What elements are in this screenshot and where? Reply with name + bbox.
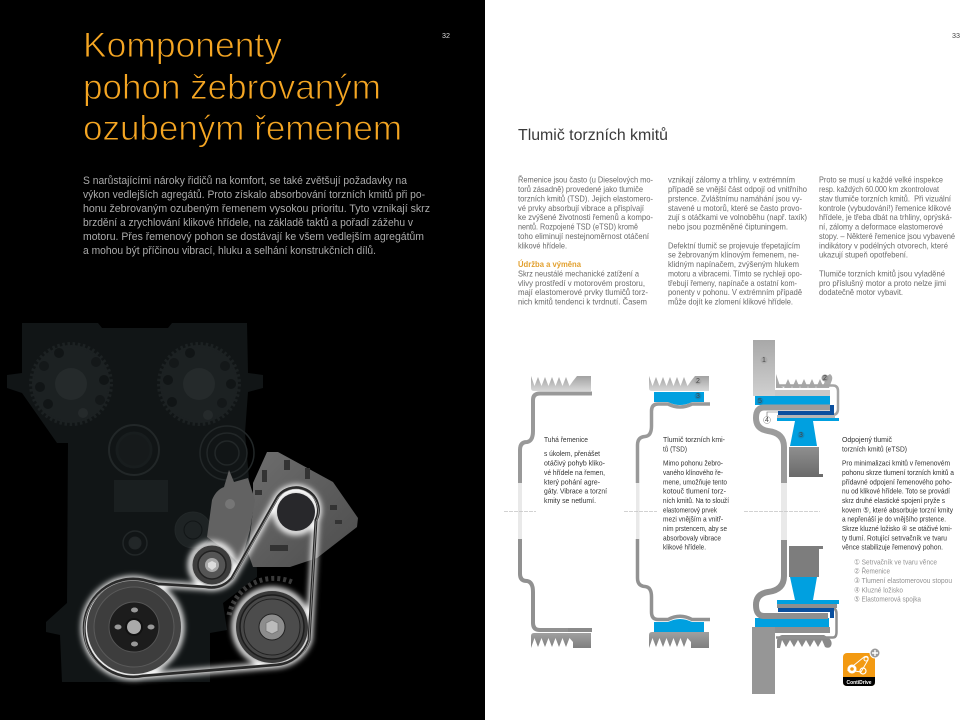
elastomeric coupling top [777,418,839,446]
flywheel bottom [752,627,775,694]
text column 1: nentů. Rozpojené TSD (eTSD) kromě [518,222,638,232]
diagram text: eTSD: skrz druhé elastické spojení pryže s [842,496,945,505]
text column 2 [668,175,807,306]
legend list: ② Řemenice [854,567,890,576]
text column 3 [819,175,955,297]
text column 1: torů zásadně) provedené jako tlumiče [518,184,643,194]
diagram text: eTSD [842,435,955,552]
callout 2 [822,374,828,382]
pulley wall bottom [756,540,828,616]
diagram text: rigid pulley: s úkolem, přenášet [544,449,600,458]
text column 2: vznikají zálomy a trhliny, v extrémním [668,175,795,185]
legend list: ① Setrvačník ve tvaru věnce [854,557,937,566]
diagram text: TSD: ních kmitů. Na to slouží [663,496,730,505]
title: pohon žebrovaným [83,68,381,107]
text column 2: klidným napínačem, zvýšeným hlukem [668,259,799,269]
inertia ring bottom [789,546,823,577]
hub fade [636,483,640,539]
hub fade [518,483,522,539]
engine illustration [7,323,358,682]
elastomer band bottom [755,618,829,627]
tensioner body [207,470,255,565]
text column 3: ní, zálomy a deformace elastomerové [819,222,943,232]
text column 2: třebují řemeny, napínače a ostatní kom- [668,278,797,288]
intro text block [83,175,430,257]
outer pulley ring bottom [776,608,836,638]
pulley wall [520,394,592,483]
slide bearing top [778,405,834,415]
diagram text: TSD: ním prstencem, aby se [663,524,727,533]
text column 1: torzních kmitů (TSD). Jejich elastomero- [518,193,653,203]
diagram text: rigid pulley: gáty. Vibrace a torzní [544,487,608,496]
diagram text: rigid pulley: otáčivý pohyb kliko- [544,459,606,468]
slide bearing bottom [778,608,834,618]
diagram: eTSD [744,340,839,694]
title [83,26,402,148]
belt section top [649,376,709,391]
text column 3: Proto se musí u každé velké inspekce [819,175,943,185]
icon: ContiDrive badge [843,648,880,686]
text column 1: ke zvýšené životnosti řemenů a kompo- [518,212,653,222]
inner band bottom [777,604,837,608]
pulley wall top [756,408,830,483]
diagram: TSD [624,376,710,648]
diagram text: rigid pulley [544,435,608,505]
text column 3: Tlumiče torzních kmitů jsou vyladěné [819,268,945,278]
belt section top [531,376,591,391]
center line [624,510,657,512]
alternator [248,452,358,567]
camshaft gear left [32,345,110,423]
intro text block: honu žebrovaným ozubeným řemenem vysokou prioritu. Tyto vznikají skrz [83,203,430,215]
text column 2: případě se vnější část odpojí od vnitřního [668,184,807,194]
text column 1: mají elastomerové prvky tlumičů torz- [518,287,648,297]
hub fade [781,483,787,540]
panel: black left page [0,0,485,720]
callout 2: 2 [696,378,700,385]
legend list [854,557,952,604]
text column 1: nich kmitů tendenci k tvrdnutí. Časem [518,296,647,306]
diagram text: rigid pulley: který pohání agre- [544,477,600,486]
diagram text: TSD: Mimo pohonu žebro- [663,459,723,468]
text column 1: Skrz neustálé mechanické zatížení a [518,268,639,278]
callout 4: 4 [765,417,769,424]
lower right pulley [236,591,308,663]
belt highlight [84,489,318,678]
intro text block: motoru. Přes řemenový pohon se dostávají ke všem vedlejším agregátům [83,231,424,243]
pulley wall [638,404,710,483]
text column 2: Defektní tlumič se projevuje třepetajícím [668,240,800,250]
callout 1 [760,356,768,364]
center line [744,510,820,512]
belt section top [776,374,832,388]
flywheel top [753,340,775,396]
text column 1: toho eliminují nestejnoměrnost otáčení [518,231,650,241]
outer pulley ring top [776,386,838,415]
page number 32: 32 [442,31,450,40]
diagram text: rigid pulley: kmity se netlumí. [544,496,596,505]
ghost bracket [114,480,168,512]
callout 3: 3 [696,393,700,400]
intro text block: brzdění a zrychlování klikové hřídele, na základě taktů a pořadí zážehu v [83,217,413,229]
diagram text: TSD [663,435,730,552]
subheading: Údržba a výměna: Údržba a výměna [518,258,581,269]
elastomer band top [755,396,830,405]
diagram text: TSD: vaného klínového ře- [663,468,723,477]
callout 2: 2 [823,375,827,382]
diagram text: eTSD: a nepřenáší je do vnějšího prstence. [842,515,946,524]
legend list: ④ Kluzné ložisko [854,585,903,594]
callout 2 [694,378,702,385]
diagram text: eTSD: Pro minimalizaci kmitů v řemenovém [842,459,950,468]
diagram text: TSD: klikové hřídele. [663,543,706,552]
text column 1: vlivy prostředí v motorovém prostoru, [518,278,645,288]
callout 3: 3 [799,432,803,439]
text column 3: indikátory v podélných otvorech, které [819,240,948,250]
heading: Tlumič torzních kmitů: Tlumič torzních kmitů [518,127,668,144]
callout 5 [756,398,764,405]
belt glow [84,488,318,677]
text column 2: ponenty v pohonu. V extrémním případě [668,287,802,297]
text column 3: pro příslušný motor a proto nelze jimi [819,278,946,288]
diagram text: TSD: kotouč tlumení torz- [663,487,727,496]
callout 3 [694,392,702,400]
callout 3 [798,432,804,439]
diagram text: eTSD: Odpojený tlumič [842,435,892,444]
diagram text: rigid pulley: Tuhá řemenice [544,435,588,444]
crankshaft pulley [87,580,181,674]
elastomeric coupling bottom [777,577,839,604]
diagram text: TSD: absorbovaly vibrace [663,533,721,542]
elastomer bottom [654,619,704,632]
text column 2: motoru a vibracemi. Tímto se rychleji opo- [668,268,802,278]
diagram text: eTSD: ty tlumí. Rotující setrvačník ve tvaru [842,533,947,542]
inertia ring top [789,447,823,477]
inner band top [777,415,835,418]
text column 3: dodatečně motor vybavit. [819,287,903,297]
belt section bottom [531,633,591,648]
diagram text: TSD: elastomerový prvek [663,505,717,514]
diagram text: TSD: Tlumič torzních kmi- [663,435,725,444]
belt section bottom [649,632,709,648]
center line [504,510,536,512]
belt section bottom [777,635,832,648]
text column 1: Řemenice jsou často (u Dieselových mo- [518,175,653,185]
text column 2: může dojít ke zlomení klikové hřídele. [668,296,793,306]
text column 1: vé prvky absorbují vibrace a přispívají [518,203,645,213]
text column 2: zují s otáčkami ve volnoběhu (např. taxík) [668,212,807,222]
intro text block: a mohou být příčinou vibrací, hluku a selhání konstrukčních dílů. [83,245,376,257]
belt [84,488,318,677]
icon: ContiDrive badge: ContiDrive [846,680,872,686]
idler pulleys (ghosted) [109,425,254,555]
text column 2: nebo jsou pozměněné čiptuningem. [668,222,788,232]
bearing leader [767,412,778,417]
callout 4 [764,416,770,424]
diagram text: rigid pulley: vé hřídele na řemen, [544,468,605,477]
alternator pulley [277,493,315,531]
text column 2: stavené u motorů, které se často provo- [668,203,802,213]
callout 5: 5 [758,398,762,405]
legend list: ⑤ Elastomerová spojka [854,595,922,604]
diagram text: TSD: mene, umožňuje tento [663,477,727,486]
intro text block: výkon vedlejších agregátů. Proto získalo absorbování torzních kmitů při po- [83,189,425,201]
text column 1: klikové hřídele. [518,240,567,250]
text column 3: resp. každých 60.000 km zkontrolovat [819,184,940,194]
text column 3: ukazují stupeň opotřebení. [819,250,908,260]
intro text block: S narůstajícími nároky řidičů na komfort, se také zvětšují požadavky na [83,175,408,187]
text column 2: se žebrovaným klínovým řemenem, ne- [668,250,799,260]
diagram: rigid pulley [504,376,592,648]
text column 1 [518,175,653,306]
diagram text: TSD: tů (TSD) [663,444,687,453]
engine silhouette [7,323,263,682]
text column 2: prstence. Zvláštnímu namáhání jsou vy- [668,193,802,203]
tensioner pulley [192,545,232,585]
diagram text: TSD: mezi vnějším a vnitř- [663,515,723,524]
callout 1: 1 [762,357,766,364]
title: Komponenty [83,26,282,65]
camshaft gear right [160,345,238,423]
title: ozubeným řemenem [83,109,402,148]
text column 3: stav tlumiče torzních kmitů. Při vizuální [819,193,952,203]
diagram text: eTSD: věnce stabilizuje řemenový pohon. [842,543,943,552]
sprocket behind lower pulley [229,578,292,615]
diagram text: eTSD: torzních kmitů (eTSD) [842,444,907,453]
elastomer top [654,392,704,405]
